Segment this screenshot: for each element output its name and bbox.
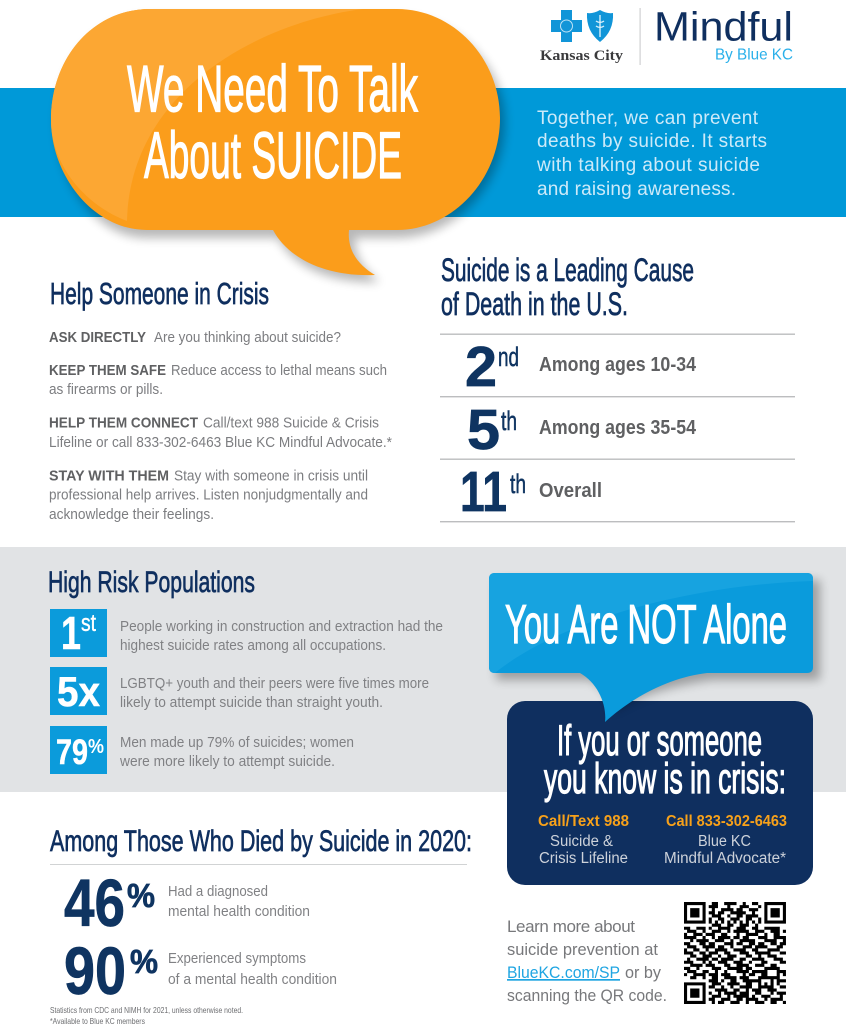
orange speech bubble: About SUICIDE [144,118,402,192]
panel: among those who died by suicide [50,825,472,1009]
stat: 90% [64,934,337,1009]
text block: keep them safe [49,362,387,398]
logo: Mindful by Blue KC [654,4,793,64]
panel: help someone in crisis [49,276,392,523]
footnotes: Statistics from CDC and NIMH for 2021, unless otherwise noted. [50,1005,243,1015]
stat: 79%: Men made up 79% of suicides; women [120,734,354,751]
text block: keep them safe: Reduce access to lethal means such [171,362,387,379]
panel: leading cause of death [440,252,795,524]
blue banner [0,88,846,217]
stat: 90%: Experienced symptoms [168,950,306,967]
stat: 5x: LGBTQ+ youth and their peers were five times more [120,675,429,692]
heading: of Death in the U.S. [441,286,628,322]
text block: keep them safe: as firearms or pills. [49,381,163,398]
text block: learn more: or by [625,963,661,982]
stat: 90%: 90 [64,934,126,1009]
stat: 46%: % [127,877,155,914]
text block: ask directly: ASK DIRECTLY [49,329,146,346]
stat: 5th: 5 [467,398,500,462]
intro text: deaths by suicide. It starts [537,131,767,152]
heading: Help Someone in Crisis [50,276,269,311]
logo tagline: By Blue KC [715,46,793,64]
stat: 11th: 11 [460,460,507,524]
text block: ask directly [49,329,341,346]
heading: Among Those Who Died by Suicide in 2020: [50,825,472,858]
contact: call or text 988: Crisis Lifeline [539,850,628,867]
stat: 11th: th [510,469,526,499]
stat: 5th: th [501,406,517,436]
orange speech bubble [51,9,505,282]
stat: 11th: Overall [539,480,602,502]
stat: 90%: % [130,943,158,980]
stat: 79% [50,726,354,774]
stat: 2nd: nd [498,342,519,372]
panel: crisis contacts [507,701,813,885]
text block: learn more: suicide prevention at [507,940,658,959]
heading [441,252,694,322]
stat: 2nd [465,335,697,399]
stat: 79%: % [88,736,104,758]
stat: 5x: 5x [57,668,101,715]
logo divider [640,8,641,65]
heading: Suicide is a Leading Cause [441,252,694,288]
text block: help them connect: HELP THEM CONNECT [49,414,198,432]
stat: 79%: 79 [56,733,88,772]
text block: learn more: scanning the QR code. [507,986,667,1005]
stat: 1st [50,607,443,659]
icon: QR code [684,902,786,1004]
stat: 11th [460,460,602,524]
text block: stay with them: Stay with someone in crisis until [174,468,368,484]
stat: 1st: st [81,610,96,637]
intro text [536,108,767,200]
stat: 79%: were more likely to attempt suicide. [119,753,335,770]
stat: 1st: highest suicide rates among all occupations. [120,637,386,654]
contact: call or text 988: Call/Text 988 [538,813,629,830]
text block: stay with them: STAY WITH THEM [49,468,169,484]
text block: keep them safe: KEEP THEM SAFE [49,362,166,379]
logo text: Kansas City: Kansas City [540,48,624,64]
blue speech bubble [489,573,820,722]
contact: call or text 988 [538,813,629,867]
contact: call advocate: Blue KC [698,833,751,850]
stat: 46%: Had a diagnosed [168,883,268,900]
text block: help them connect [49,414,392,451]
logo: Blue KC [540,10,624,64]
text block: learn more [507,917,667,1005]
text block: help them connect: Lifeline or call 833-302-6463 Blue KC Mindful Advocate.* [49,434,392,451]
logo wordmark: Mindful [654,4,793,50]
stat: 90%: of a mental health condition [168,971,337,988]
stat: 5th [467,398,697,462]
contact: call or text 988: Suicide & [550,833,614,850]
stat: 5x [50,667,429,715]
icon: blue shield [587,10,613,42]
intro text: with talking about suicide [536,155,760,176]
text block: stay with them [49,468,368,523]
text block: stay with them: acknowledge their feelings. [49,506,214,523]
stat: 5x: likely to attempt suicide than straight youth. [120,694,383,711]
text block: ask directly: Are you thinking about suicide? [154,329,341,346]
panel: high risk populations [48,566,443,774]
footnotes [50,1005,243,1024]
stat: 5th: Among ages 35-54 [539,417,697,439]
title: We Need To Talk [127,52,419,126]
text block: learn more: Learn more about [507,917,635,936]
stat: 46% [64,866,310,941]
text block: stay with them: professional help arrives. Listen nonjudgmentally and [49,486,368,504]
stat: 1st: People working in construction and extraction had the [120,618,443,635]
text block: help them connect: Call/text 988 Suicide & Crisis [203,414,379,432]
intro text: Together, we can prevent [537,108,759,129]
stat: 46%: mental health condition [168,903,310,920]
heading: High Risk Populations [48,566,255,599]
icon: blue cross [551,10,582,42]
gray band [0,547,846,792]
contact: call advocate: Mindful Advocate* [664,850,786,867]
stat: 2nd: 2 [465,335,497,399]
contact: call advocate: Call 833-302-6463 [666,813,787,830]
stat: 1st: 1 [61,607,81,659]
stat: 2nd: Among ages 10-34 [539,354,697,376]
heading [544,717,786,803]
intro text: and raising awareness. [537,179,736,200]
stat: 46%: 46 [64,866,125,941]
text block: learn more: BlueKC.com/SP [507,963,620,982]
contact: call advocate [664,813,787,867]
